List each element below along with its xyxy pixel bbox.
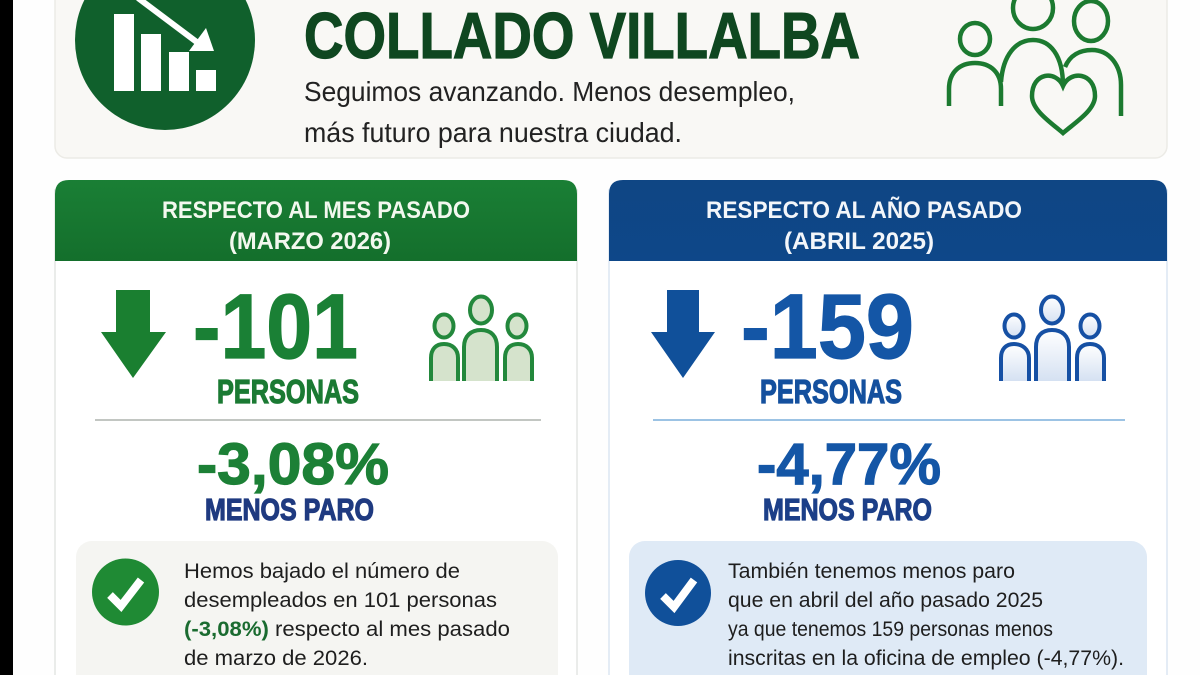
panel heading: last month [55, 180, 577, 261]
icon: blue check [645, 560, 711, 626]
icon: green down arrow [101, 290, 166, 378]
panel heading: last month: (MARZO 2026) [229, 228, 391, 255]
panel heading: last year [609, 180, 1167, 261]
callout text: desempleados en 101 personas [184, 588, 497, 612]
subtitle: Seguimos avanzando. Menos desempleo, [304, 76, 795, 107]
number: minus 4,77 percent: -4,77% [757, 432, 941, 497]
icon: green check [92, 558, 159, 626]
callout: monthly explanation [76, 541, 558, 675]
number: minus 3,08 percent: -3,08% [197, 432, 389, 497]
icon: green people [431, 296, 532, 381]
callout text [184, 559, 510, 670]
subtitle: más futuro para nuestra ciudad. [304, 117, 682, 148]
title: COLLADO VILLALBA [304, 0, 860, 72]
icon: blue down arrow [651, 290, 715, 378]
label: personas: PERSONAS [217, 373, 359, 410]
callout text: inscritas en la oficina de empleo (-4,77%). [728, 646, 1124, 670]
callout text: que en abril del año pasado 2025 [728, 588, 1043, 612]
callout text: de marzo de 2026. [184, 646, 368, 670]
panel heading: last year: RESPECTO AL AÑO PASADO [706, 196, 1022, 224]
panel: yearly comparison [609, 180, 1167, 675]
callout text [728, 559, 1124, 670]
left black band [0, 0, 13, 675]
icon: family with heart [949, 0, 1121, 133]
panel heading: last year: (ABRIL 2025) [784, 228, 934, 255]
callout text: También tenemos menos paro [728, 559, 1015, 583]
callout: yearly explanation [629, 541, 1147, 675]
subtitle [304, 76, 795, 148]
callout text: ya que tenemos 159 personas menos [728, 617, 1053, 641]
number: minus 101: -101 [193, 276, 358, 378]
panel: monthly comparison [55, 180, 577, 675]
panel heading: last month: RESPECTO AL MES PASADO [162, 197, 470, 224]
number: minus 159: -159 [741, 276, 914, 378]
icon: falling bar chart [75, 0, 255, 130]
panel: header card [55, 0, 1167, 158]
callout text: (-3,08%) respecto al mes pasado [184, 617, 510, 641]
label: menos paro: MENOS PARO [205, 492, 374, 527]
label: menos paro: MENOS PARO [763, 492, 932, 527]
callout text: Hemos bajado el número de [184, 559, 460, 583]
icon: blue people [1001, 296, 1104, 381]
label: personas: PERSONAS [760, 373, 902, 410]
